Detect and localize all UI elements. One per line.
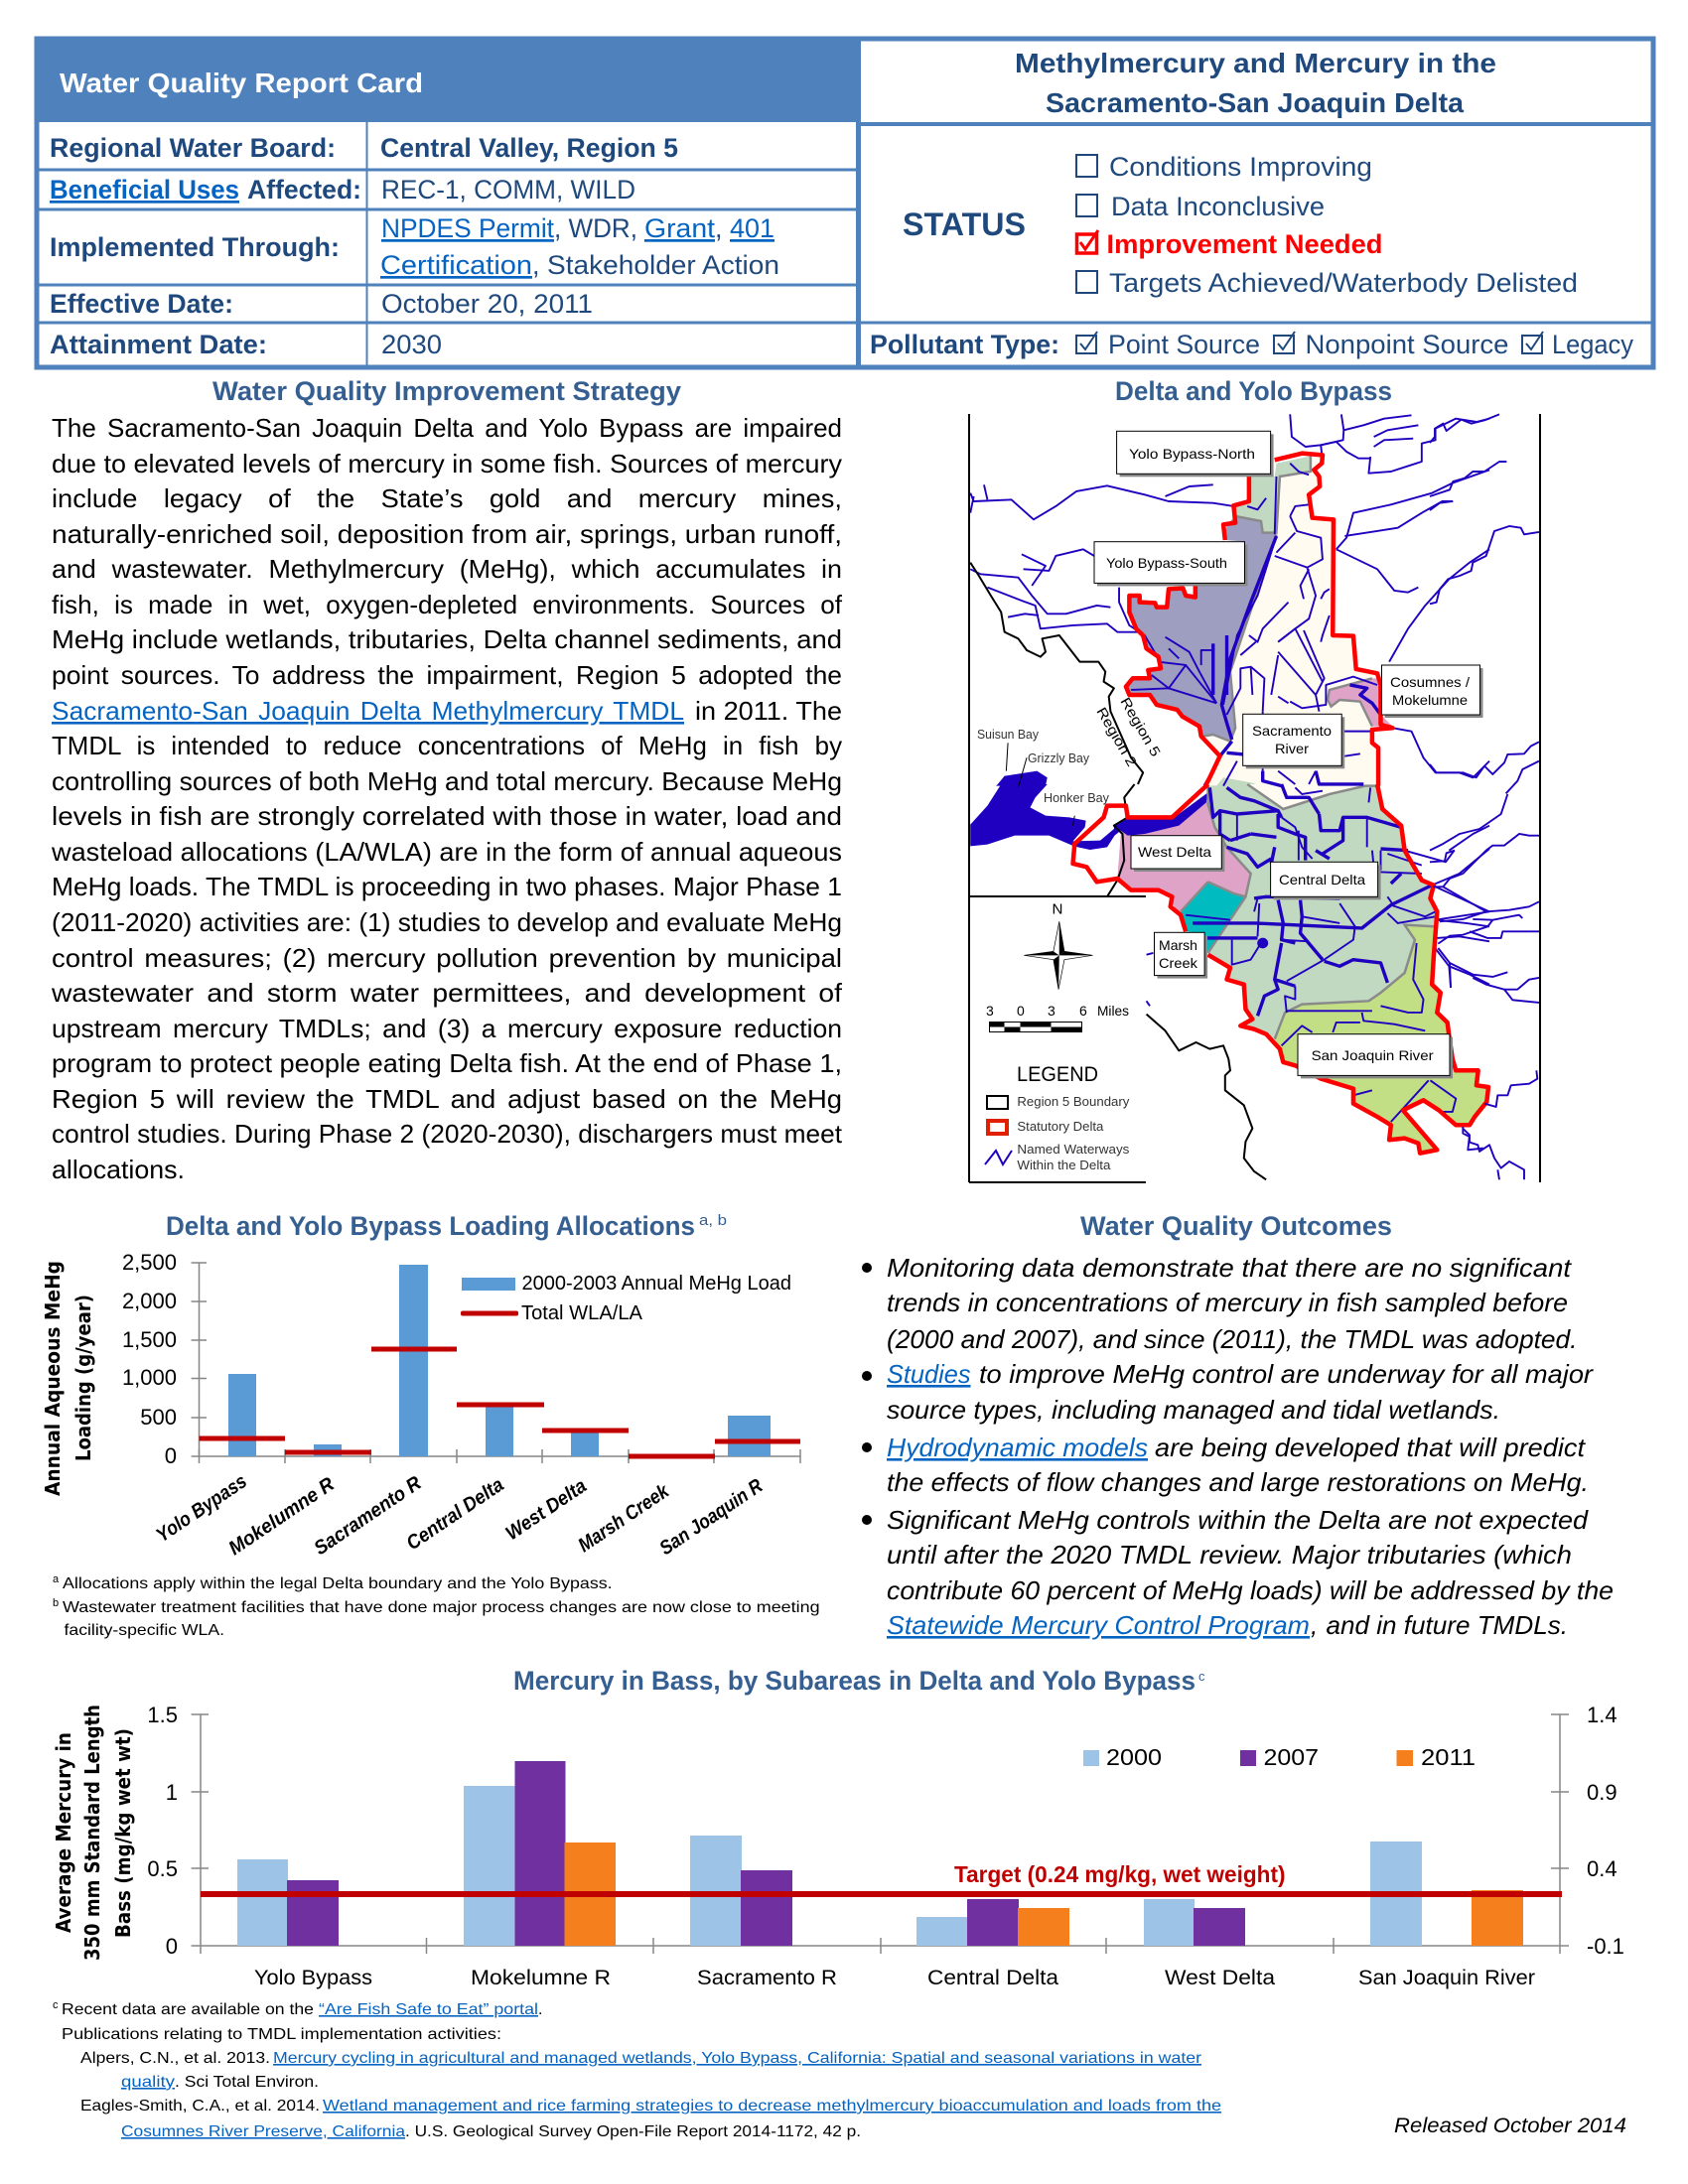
pollutant type row: Point Source <box>1108 330 1260 359</box>
footnotes a and b: b <box>53 1597 59 1609</box>
text block: improvement strategy paragraph: levels in fish are strongly correlated with those in water, load and <box>52 801 842 831</box>
map scale bar: 6 <box>1079 1003 1087 1019</box>
bullet 4: Statewide Mercury Control Program <box>887 1610 1310 1640</box>
pollutant type row: Pollutant Type: <box>870 330 1059 359</box>
table row: effective date: October 20, 2011 <box>381 289 593 319</box>
chart legend <box>1083 1744 1476 1770</box>
bullet 2: source types, including managed and tidal wetlands. <box>887 1395 1500 1425</box>
footnotes a and b: a <box>53 1573 60 1585</box>
map label: sacramento river <box>1243 714 1344 768</box>
status label: STATUS <box>903 206 1026 242</box>
bar chart: loading allocations <box>41 1250 800 1560</box>
map region fills upper <box>996 455 1393 786</box>
title: methylmercury and mercury: Methylmercury and Mercury in the <box>1015 48 1496 78</box>
map legend: Statutory Delta <box>1017 1119 1104 1134</box>
map label: marsh creek: Marsh <box>1159 937 1197 953</box>
bullet 1: Monitoring data demonstrate that there are no significant <box>887 1253 1573 1283</box>
text block: improvement strategy paragraph: naturally-enriched soil, deposition from air, springs, urban runoff, <box>52 519 842 549</box>
map label: yolo bypass north: Yolo Bypass-North <box>1129 446 1255 462</box>
pollutant type row <box>870 330 1633 359</box>
x axis labels: Sacramento R <box>697 1967 837 1989</box>
bars: 2000 <box>237 1786 1422 1946</box>
y axis title: Average Mercury in <box>52 1732 75 1933</box>
text block: improvement strategy paragraph: point sources. To address the impairment, Region 5 adopted the <box>52 660 842 690</box>
map label: sacramento river: River <box>1275 741 1309 756</box>
text block: improvement strategy paragraph: due to elevated levels of mercury in some fish. Sources of mercury <box>52 449 842 478</box>
map waterways lower <box>1073 784 1489 1179</box>
table row: implemented through: Implemented Through: <box>50 232 340 262</box>
chart legend: 2000-2003 Annual MeHg Load <box>522 1273 791 1295</box>
text block: improvement strategy paragraph <box>51 413 843 1184</box>
footnote c and publications: Recent data are available on the <box>62 2001 314 2018</box>
footnote c and publications: c <box>53 1999 59 2011</box>
text block: improvement strategy paragraph: include legacy of the State’s gold and mercury mines, <box>52 483 842 513</box>
left axis labels <box>147 1703 178 1959</box>
heading: loading allocations: a, b <box>699 1212 727 1229</box>
status checklist: Improvement Needed <box>1106 229 1382 259</box>
heading: report card: Water Quality Report Card <box>60 68 423 98</box>
right axis labels: 0.9 <box>1587 1780 1618 1805</box>
title: methylmercury and mercury <box>1015 48 1496 118</box>
map labels: bays and regions: Suisun Bay <box>977 727 1039 742</box>
table row: beneficial uses: REC-1, COMM, WILD <box>381 175 635 205</box>
y axis title: Bass (mg/kg wet wt) <box>111 1728 135 1938</box>
footnote c and publications: Cosumnes River Preserve, California <box>121 2123 405 2140</box>
x axis labels: Central Delta <box>402 1474 507 1555</box>
text block: improvement strategy paragraph: program to protect people eating Delta fish. At the end of Phase 1, <box>52 1048 842 1078</box>
map label: cosumnes mokelumne: Cosumnes / <box>1390 674 1470 690</box>
y axis title: Loading (g/year) <box>71 1295 95 1461</box>
icon: compass rose <box>1024 902 1093 990</box>
bullet 4: Significant MeHg controls within the Delta are not expected <box>887 1505 1590 1535</box>
x axis labels: Mokelumne R <box>471 1967 611 1989</box>
table row: effective date: Effective Date: <box>50 289 233 319</box>
map label: marsh creek <box>1154 932 1207 979</box>
table row: implemented through <box>50 213 779 280</box>
heading: loading allocations: Delta and Yolo Bypass Loading Allocations <box>166 1211 695 1241</box>
x axis labels: Marsh Creek <box>574 1480 673 1557</box>
map labels: bays and regions: Region 2 <box>1093 705 1140 769</box>
map scale bar: 3 <box>1048 1003 1055 1019</box>
bullet 2: to improve MeHg control are underway for all major <box>979 1359 1594 1389</box>
bullet 1 <box>862 1253 1577 1354</box>
table row: implemented through: , <box>532 250 540 280</box>
table row: beneficial uses <box>50 175 635 205</box>
text block: improvement strategy paragraph: The Sacramento-San Joaquin Delta and Yolo Bypass are impaired <box>52 413 842 443</box>
table row: regional water board <box>50 133 678 163</box>
text block: improvement strategy paragraph: MeHg loads. The TMDL is proceeding in two phases. Major Phase 1 <box>52 872 842 901</box>
map legend: LEGEND <box>1017 1063 1098 1086</box>
x axis labels: West Delta <box>1165 1967 1275 1989</box>
left axis labels: 1.5 <box>147 1703 178 1727</box>
target label: Target (0.24 mg/kg, wet weight) <box>954 1861 1285 1887</box>
y axis title <box>52 1705 135 1961</box>
chart legend: Total WLA/LA <box>521 1302 643 1324</box>
table row: attainment date: 2030 <box>381 330 442 359</box>
footnote c and publications <box>53 1999 1221 2140</box>
map legend: Within the Delta <box>1017 1158 1111 1172</box>
x axis labels <box>254 1967 1535 1989</box>
bars: 2011 <box>564 1843 1523 1946</box>
text block: improvement strategy paragraph: fish, is made in wet, oxygen-depleted environments. Sources of <box>52 590 843 619</box>
map label: san joaquin river: San Joaquin River <box>1312 1047 1434 1063</box>
map label: cosumnes mokelumne: Mokelumne <box>1392 692 1468 708</box>
table row: beneficial uses: Affected: <box>247 175 361 205</box>
text block: improvement strategy paragraph: control measures; (2) mercury pollution prevention by municipal <box>52 943 842 973</box>
left axis labels: 0 <box>166 1934 178 1959</box>
y axis labels: 1,500 <box>122 1327 177 1352</box>
status checklist: Data Inconclusive <box>1111 192 1325 221</box>
left axis labels: 1 <box>166 1780 178 1805</box>
target line <box>201 1891 1562 1897</box>
footnote c and publications: Mercury cycling in agricultural and managed wetlands, Yolo Bypass, California: Spatial and seasonal variations in water <box>273 2050 1202 2067</box>
y axis labels <box>122 1250 177 1468</box>
bullet 2: Studies <box>887 1359 971 1389</box>
map label: central delta <box>1271 862 1381 899</box>
bullet 4: until after the 2020 TMDL review. Major tributaries (which <box>887 1540 1572 1570</box>
table row: regional water board: Regional Water Board: <box>50 133 336 163</box>
table row: effective date <box>50 289 593 319</box>
map scale bar <box>986 1003 1129 1032</box>
chart legend: 2000 <box>1106 1744 1162 1770</box>
pollutant type row: Nonpoint Source <box>1305 330 1509 359</box>
release date: Released October 2014 <box>1394 2115 1626 2137</box>
table row: implemented through: Grant <box>644 213 716 243</box>
footnotes a and b: Wastewater treatment facilities that have done major process changes are now close to meeting <box>63 1599 820 1616</box>
map labels: bays and regions: Grizzly Bay <box>1028 751 1089 765</box>
text block: improvement strategy paragraph: (2011-2020) activities are: (1) studies to develop and evaluate MeHg <box>52 907 842 937</box>
bullet 3: Hydrodynamic models <box>887 1433 1148 1462</box>
right axis labels: 1.4 <box>1587 1703 1618 1727</box>
heading: water quality improvement strategy: Water Quality Improvement Strategy <box>212 376 681 406</box>
map scale bar: 3 <box>986 1003 994 1019</box>
heading: delta and yolo bypass: Delta and Yolo Bypass <box>1115 376 1392 406</box>
status checklist: Conditions Improving <box>1109 152 1372 182</box>
icon: compass rose: N <box>1053 902 1063 918</box>
x axis labels <box>152 1470 768 1560</box>
y axis title: 350 mm Standard Length <box>80 1705 104 1961</box>
x axis labels: Central Delta <box>927 1967 1058 1989</box>
table row: implemented through: Stakeholder Action <box>547 250 779 280</box>
table row: implemented through: , <box>715 213 723 243</box>
right axis labels: 0.4 <box>1587 1856 1618 1881</box>
map label: san joaquin river <box>1298 1034 1453 1078</box>
map scale bar: 0 <box>1017 1003 1025 1019</box>
panel: report card header table <box>35 37 1653 367</box>
footnote c and publications: . <box>538 2001 542 2018</box>
footnotes a and b: facility-specific WLA. <box>64 1622 224 1639</box>
map scale bar: Miles <box>1097 1003 1129 1019</box>
bullet 3: are being developed that will predict <box>1155 1433 1587 1462</box>
title: methylmercury and mercury: Sacramento-San Joaquin Delta <box>1046 87 1464 118</box>
map label: central delta: Central Delta <box>1279 872 1365 887</box>
map label: yolo bypass north <box>1117 431 1274 477</box>
map waterways far right lower <box>1430 794 1539 1179</box>
text block: improvement strategy paragraph: TMDL is intended to reduce concentrations of MeHg in fish by <box>52 731 842 760</box>
right axis labels <box>1587 1703 1624 1959</box>
bullet 4 <box>862 1505 1614 1640</box>
map legend: Region 5 Boundary <box>1017 1094 1130 1109</box>
text block: improvement strategy paragraph: wasteload allocations (LA/WLA) are in the form of annual aqueous <box>51 837 842 867</box>
bullet 3 <box>862 1433 1589 1497</box>
map labels: bays and regions: Honker Bay <box>1044 790 1109 805</box>
map boundary frame <box>969 414 1540 1182</box>
footnote c and publications: Publications relating to TMDL implementation activities: <box>62 2026 501 2043</box>
map label: sacramento river: Sacramento <box>1252 723 1332 739</box>
footnote c and publications: quality <box>121 2074 175 2091</box>
map legend <box>985 1063 1130 1172</box>
y axis labels: 500 <box>140 1405 177 1430</box>
chart legend <box>461 1273 791 1324</box>
map: delta and yolo bypass <box>969 414 1540 1182</box>
text block: improvement strategy paragraph: controlling sources of both MeHg and total mercury. Because MeHg <box>52 766 842 796</box>
right axis labels: -0.1 <box>1587 1934 1624 1959</box>
footnote c and publications: . U.S. Geological Survey Open-File Report 2014-1172, 42 p. <box>405 2123 861 2140</box>
status checklist: Targets Achieved/Waterbody Delisted <box>1109 268 1578 298</box>
footnote c and publications: Eagles-Smith, C.A., et al. 2014. <box>80 2098 320 2115</box>
y axis labels: 2,000 <box>122 1289 177 1313</box>
x axis labels: Yolo Bypass <box>152 1470 251 1547</box>
y axis title: Annual Aqueous MeHg <box>41 1261 65 1496</box>
map waterways upper <box>970 414 1489 787</box>
pollutant type row: Legacy <box>1552 330 1633 359</box>
map labels: bays and regions: Region 5 <box>1117 695 1164 759</box>
bullet 4: contribute 60 percent of MeHg loads) will be addressed by the <box>887 1575 1614 1605</box>
bullet 4: and in future TMDLs. <box>1327 1610 1568 1640</box>
bars: annual MeHg load <box>228 1265 771 1456</box>
map label: west delta: West Delta <box>1138 844 1211 860</box>
text block: improvement strategy paragraph: allocations. <box>52 1155 185 1184</box>
footnote c and publications: Alpers, C.N., et al. 2013. <box>80 2050 270 2067</box>
map label: yolo bypass south: Yolo Bypass-South <box>1106 555 1227 571</box>
footnote c and publications: Wetland management and rice farming strategies to decrease methylmercury bioaccumulation and loads from the <box>323 2098 1221 2115</box>
map legend: Named Waterways <box>1017 1142 1130 1157</box>
table row: regional water board: Central Valley, Region 5 <box>380 133 678 163</box>
footnote c and publications: . Sci Total Environ. <box>175 2074 319 2091</box>
x axis labels: West Delta <box>501 1475 591 1545</box>
bars: 2007 <box>287 1761 1245 1946</box>
table row: beneficial uses: Beneficial Uses <box>50 175 239 205</box>
x axis labels: Yolo Bypass <box>254 1967 372 1989</box>
bullet 1: (2000 and 2007), and since (2011), the TMDL was adopted. <box>887 1324 1577 1354</box>
y axis labels: 1,000 <box>122 1365 177 1390</box>
text block: improvement strategy paragraph: MeHg include wetlands, tributaries, Delta channel sediments, and <box>52 624 842 654</box>
text block: improvement strategy paragraph: upstream mercury TMDLs; and (3) a mercury exposure reduction <box>52 1014 842 1043</box>
map label: yolo bypass south <box>1094 542 1247 586</box>
bullet 2 <box>862 1359 1594 1425</box>
chart legend: 2007 <box>1263 1744 1319 1770</box>
map waterways far right upper <box>1430 414 1539 793</box>
x axis labels: San Joaquin R <box>655 1475 768 1560</box>
y axis labels: 0 <box>165 1443 177 1468</box>
table row: attainment date: Attainment Date: <box>50 330 267 359</box>
bullet 3: the effects of flow changes and large restorations on MeHg. <box>887 1467 1589 1497</box>
y axis labels: 2,500 <box>122 1250 177 1275</box>
x axis labels: Mokelumne R <box>224 1473 339 1560</box>
footnote c and publications: “Are Fish Safe to Eat” portal <box>319 2001 538 2018</box>
x axis labels: Sacramento R <box>310 1472 426 1560</box>
text block: improvement strategy paragraph: Region 5 will review the TMDL and adjust based on the MeHg <box>52 1084 842 1114</box>
bullet 1: trends in concentrations of mercury in fish sampled before <box>887 1288 1568 1317</box>
chart legend: 2011 <box>1421 1744 1476 1770</box>
map label: cosumnes mokelumne <box>1382 665 1483 718</box>
table row: attainment date <box>50 330 442 359</box>
left axis labels: 0.5 <box>147 1856 178 1881</box>
text block: improvement strategy paragraph: wastewater and storm water permittees, and development of <box>51 978 843 1008</box>
table row: implemented through: 401 <box>730 213 774 243</box>
footnotes a and b <box>53 1573 820 1639</box>
map labels: bays and regions <box>977 695 1164 805</box>
heading: mercury in bass: c <box>1198 1669 1205 1684</box>
table row: implemented through: NPDES Permit <box>381 213 554 243</box>
heading: water quality outcomes: Water Quality Outcomes <box>1080 1211 1392 1241</box>
text block: improvement strategy paragraph: Sacramento-San Joaquin Delta Methylmercury TMDL <box>52 696 684 726</box>
status checklist <box>1076 152 1578 298</box>
bar chart: mercury in bass <box>52 1703 1624 1989</box>
bullet 4: , <box>1311 1610 1318 1640</box>
text block: improvement strategy paragraph: and wastewater. Methylmercury (MeHg), which accumulates in <box>52 554 842 584</box>
lines: total WLA/LA <box>199 1346 800 1459</box>
x axis labels: San Joaquin River <box>1358 1967 1535 1989</box>
table row: implemented through: Certification <box>380 250 532 280</box>
map region fills lower <box>970 784 1488 1154</box>
text block: improvement strategy paragraph: control studies. During Phase 2 (2020-2030), dischargers must meet <box>52 1119 843 1149</box>
map label: west delta <box>1131 836 1224 872</box>
footnotes a and b: Allocations apply within the legal Delta boundary and the Yolo Bypass. <box>63 1575 613 1592</box>
y axis title <box>41 1261 95 1496</box>
text block: water quality outcomes bullets <box>862 1253 1614 1640</box>
table row: implemented through: , WDR, <box>554 213 637 243</box>
heading: mercury in bass: Mercury in Bass, by Subareas in Delta and Yolo Bypass <box>513 1666 1196 1696</box>
map label: marsh creek: Creek <box>1159 955 1198 971</box>
text block: improvement strategy paragraph: in 2011. The <box>695 696 842 726</box>
